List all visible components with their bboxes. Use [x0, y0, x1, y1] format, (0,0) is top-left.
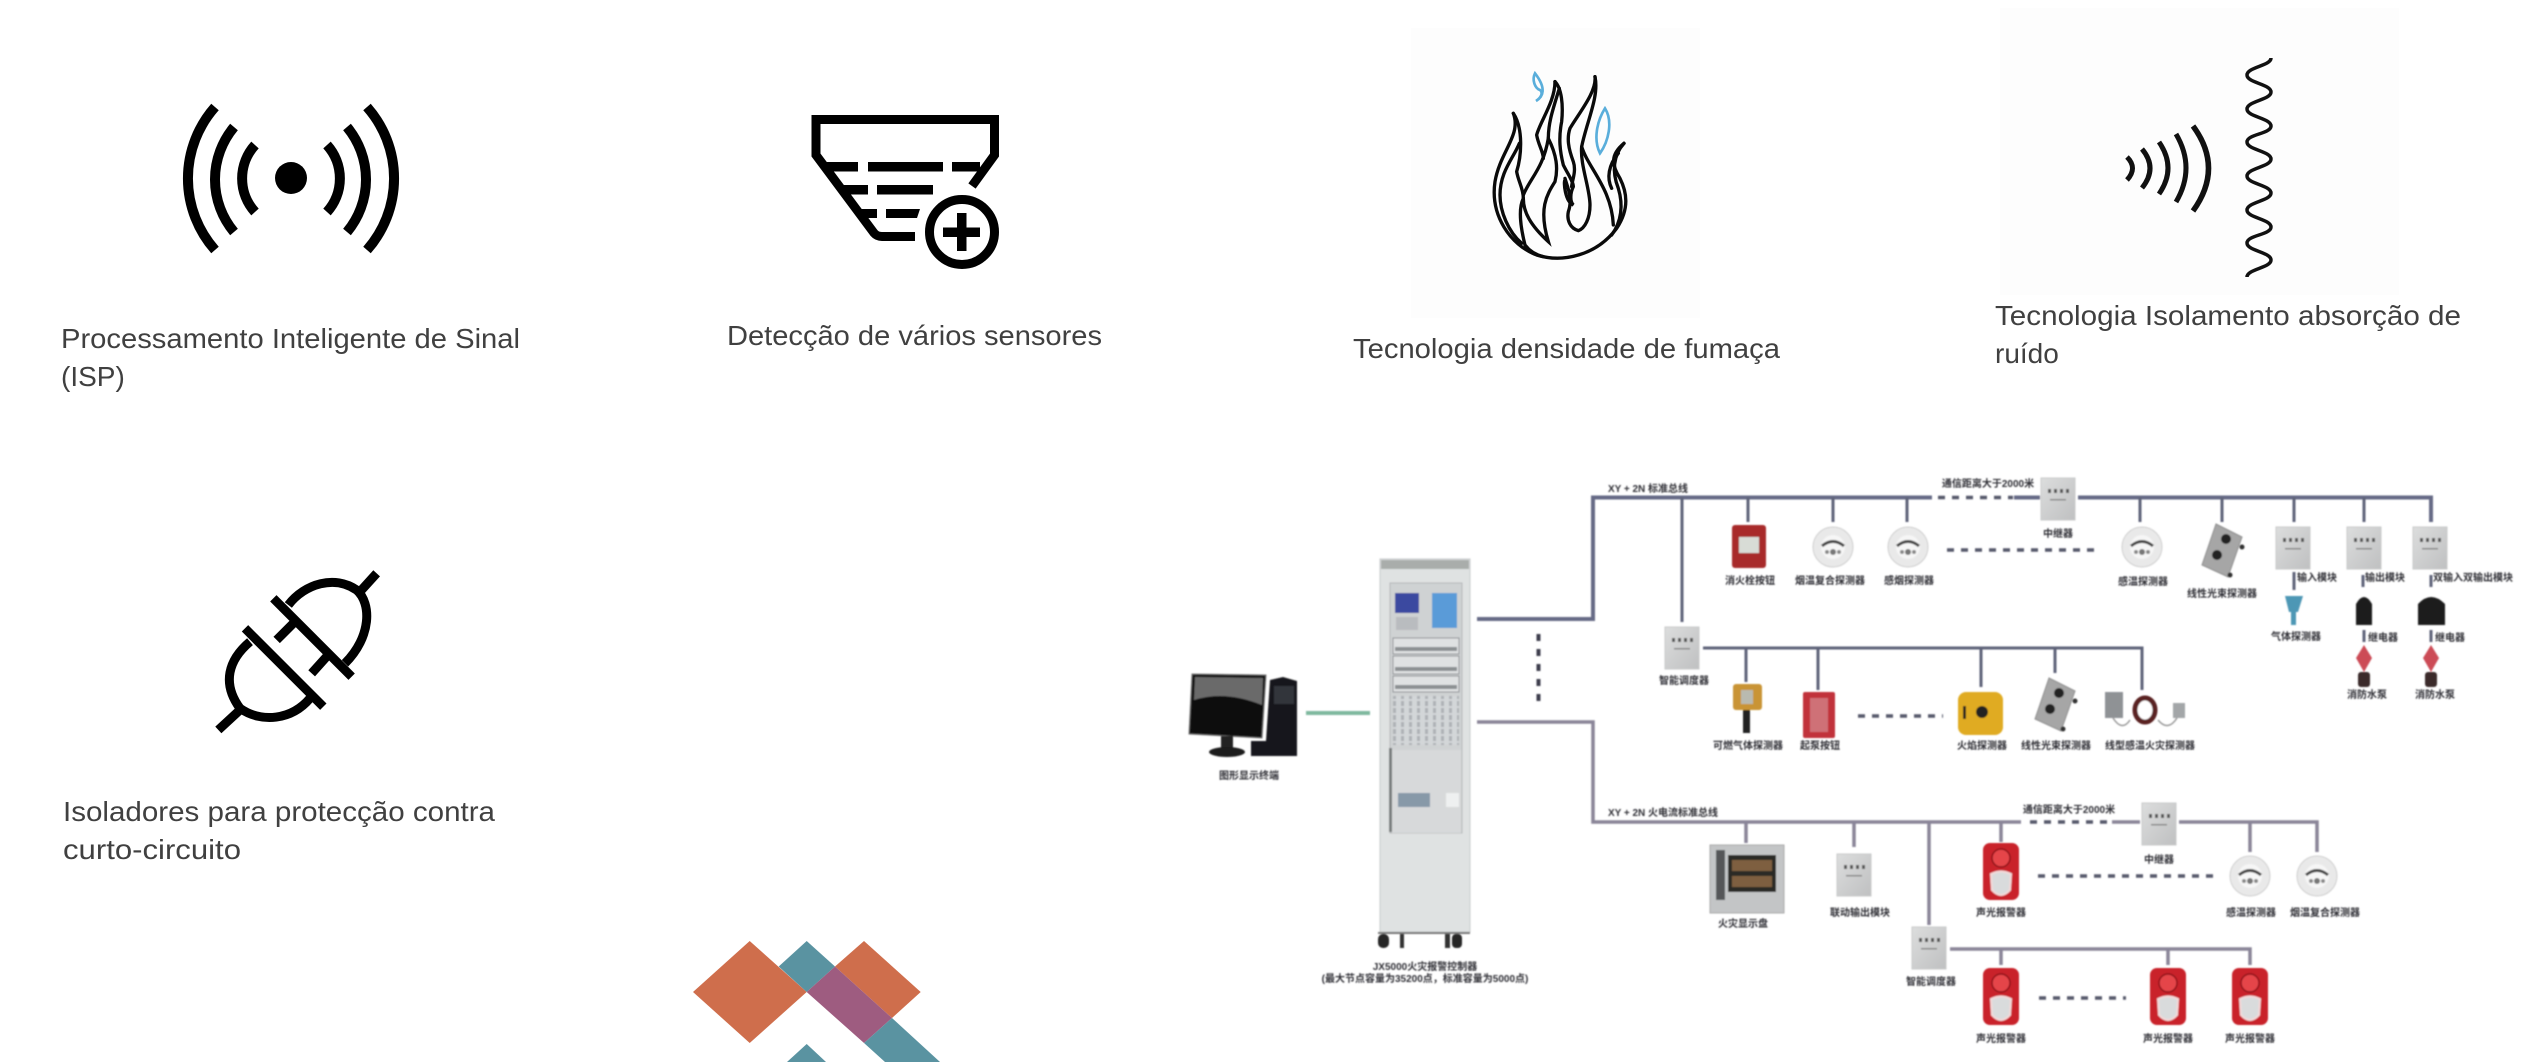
logo: geometric diamonds: [693, 941, 940, 1062]
device row: lower outputs: 烟温复合探测器: [2290, 906, 2360, 919]
caption: noise isolation: Tecnologia Isolamento absorção de: [1995, 300, 2461, 331]
device row: sounder sub-loop: [1906, 927, 2275, 1045]
signal bus: lower: XY + 2N 火电流标准总线: [1608, 806, 1718, 819]
device row: upper detectors: 烟温复合探测器: [1795, 574, 1865, 587]
device row: middle sub-loop: 线性光束探测器: [2021, 739, 2091, 752]
connector: loop dots: [1536, 634, 1540, 704]
device row: middle sub-loop: 起泵按钮: [1800, 739, 1840, 752]
caption: smoke density: Tecnologia densidade de fumaça: [1353, 333, 1780, 364]
device row: middle sub-loop: 可燃气体探测器: [1713, 739, 1783, 752]
signal bus: lower: [1477, 722, 2317, 925]
icon: computer workstation: 图形显示终端: [1219, 769, 1279, 782]
caption: signal processing: Processamento Inteligente de Sinal: [61, 323, 520, 354]
device row: sounder sub-loop: 声光报警器: [2225, 1032, 2275, 1045]
signal bus: upper: XY + 2N 标准总线: [1608, 482, 1688, 495]
controller cabinet: (最大节点容量为35200点，标准容量为5000点): [1322, 972, 1528, 985]
device row: upper detectors: 中继器: [2043, 527, 2073, 540]
caption: noise isolation: ruído: [1995, 338, 2059, 369]
device row: upper modules: 气体探测器: [2271, 630, 2321, 643]
device row: sounder sub-loop: 声光报警器: [2143, 1032, 2193, 1045]
signal bus: upper: 通信距离大于2000米: [1942, 477, 2034, 490]
device row: upper modules: 输出模块: [2365, 571, 2405, 584]
device row: upper modules: 消防水泵: [2415, 688, 2455, 701]
panel: smoke density: [1353, 28, 1780, 364]
icon: signal waves: [188, 107, 394, 250]
device row: upper modules: 消防水泵: [2347, 688, 2387, 701]
device row: sounder sub-loop: 声光报警器: [1976, 1032, 2026, 1045]
device row: lower outputs: 声光报警器: [1976, 906, 2026, 919]
icon: blue smoke wisps: [1534, 73, 1609, 153]
device row: upper modules: 继电器: [2368, 631, 2398, 644]
device row: middle sub-loop: 火焰探测器: [1957, 739, 2007, 752]
caption: signal processing: (ISP): [61, 361, 125, 392]
signal bus: upper: [1477, 477, 2431, 622]
device row: upper modules: 输入模块: [2297, 571, 2337, 584]
panel: intelligent signal processing: [61, 107, 520, 392]
panel: noise isolation: [1995, 8, 2461, 369]
connector: workstation link: [1306, 711, 1370, 715]
device row: lower outputs: [1710, 803, 2360, 930]
caption: short-circuit isolators: Isoladores para protecção contra: [63, 796, 495, 827]
device row: upper detectors: 线性光束探测器: [2187, 587, 2257, 600]
device row: sounder sub-loop: 智能调度器: [1906, 975, 1956, 988]
caption: signal processing: [61, 323, 520, 392]
device row: middle sub-loop: 智能调度器: [1659, 674, 1709, 687]
signal bus: lower: 通信距离大于2000米: [2023, 803, 2115, 816]
panel: short-circuit isolators: [63, 573, 495, 865]
device row: middle sub-loop: 线型感温火灾探测器: [2105, 739, 2195, 752]
device row: lower outputs: 火灾显示盘: [1718, 917, 1768, 930]
device row: upper detectors: 消火栓按钮: [1725, 574, 1775, 587]
icon: flame: [1494, 77, 1626, 258]
device row: middle sub-loop: [1659, 627, 2195, 752]
panel: fire alarm system diagram: [1189, 477, 2513, 1045]
device row: upper modules: [2271, 527, 2513, 701]
caption: multi-sensor detection: Detecção de vários sensores: [727, 320, 1102, 351]
device row: lower outputs: 中继器: [2144, 853, 2174, 866]
caption: short-circuit isolators: curto-circuito: [63, 834, 241, 865]
device row: upper detectors: 感烟探测器: [1884, 574, 1934, 587]
device row: upper detectors: 感温探测器: [2118, 575, 2168, 588]
device row: upper detectors: [1725, 478, 2257, 600]
controller cabinet: [1322, 559, 1528, 985]
device row: upper modules: 继电器: [2435, 631, 2465, 644]
caption: short-circuit isolators: [63, 796, 495, 865]
device row: lower outputs: 感温探测器: [2226, 906, 2276, 919]
icon: disconnected plug: [218, 573, 377, 730]
device row: upper modules: 双输入双输出模块: [2433, 571, 2513, 584]
panel: multi-sensor detection: [727, 120, 1102, 351]
icon: wavy absorbing barrier: [2247, 58, 2271, 277]
device row: lower outputs: 联动输出模块: [1830, 906, 1890, 919]
icon: computer workstation: [1189, 674, 1297, 782]
controller cabinet: JX5000火灾报警控制器: [1373, 960, 1477, 973]
icon: sound waves: [2127, 126, 2208, 211]
caption: noise isolation: [1995, 300, 2461, 369]
icon: smoke detector with plus: [816, 120, 994, 264]
